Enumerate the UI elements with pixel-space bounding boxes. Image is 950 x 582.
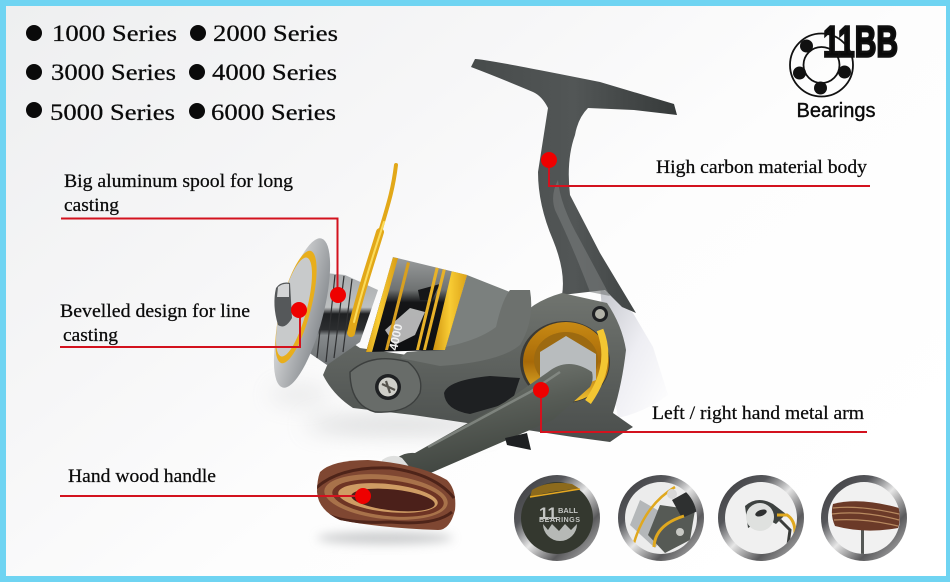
hand metal arm [397,364,593,478]
grey line roller cylinder [445,275,513,350]
spool flange [262,233,342,393]
thumbnail: spool detail [618,475,704,561]
rear rotor screw [592,306,608,322]
callout: metal arm [533,382,867,432]
callout: bevelled design: Bevelled design for line [60,301,250,322]
spinning reel illustration [262,59,677,535]
series list [26,21,338,125]
thumbnail: line roller detail [718,475,804,561]
callout: wood handle: Hand wood handle [68,466,216,487]
series list: 2000 Series [213,21,338,46]
front fork plate [350,359,421,412]
icon: 11BB bearings logo: Bearings [796,100,876,122]
callout: metal arm: Left / right hand metal arm [652,403,864,424]
series list: 1000 Series [52,21,177,46]
silver rear panel [600,287,668,418]
series list: 3000 Series [51,60,176,85]
icon: 11BB bearings logo: 11BB [823,18,898,66]
callout: wood handle [60,466,371,504]
silver handle joint [382,456,412,470]
callout: aluminum spool: casting [64,195,120,216]
series list: 4000 Series [212,60,337,85]
thumbnail: 11 ball bearings: 11 [539,504,557,523]
main body housing [323,293,633,442]
callout: bevelled design [60,301,307,347]
stem highlight [553,180,610,296]
thumbnail: wood knob detail [821,475,907,561]
thumbnail: 11 ball bearings [514,475,600,561]
spool groove lines [317,275,352,362]
wood handle knob [317,460,456,530]
spool black and gold cup [366,257,467,352]
callout: aluminum spool: Big aluminum spool for long [64,171,294,192]
callout: carbon body [541,152,870,186]
callout: bevelled design: casting [63,325,119,346]
spool threaded shaft [308,272,378,365]
callout: carbon body: High carbon material body [656,157,868,178]
gold handle collar [520,321,610,403]
lower foot clip [505,433,531,450]
front screw [375,374,401,400]
gold bail wire [351,165,396,333]
callout: aluminum spool [61,171,346,303]
bail arm: carbon body stem [471,59,677,313]
series list: 6000 Series [211,100,336,125]
series list: 5000 Series [50,100,175,125]
reel shadows [270,385,495,544]
thumbnail: 11 ball bearings: BEARINGS [539,515,580,524]
side window in the housing [444,376,520,414]
model number on spool: 4000 [386,322,406,352]
icon: 11BB bearings logo [790,18,898,122]
rotor arch arm [400,290,531,366]
thumbnail: 11 ball bearings: BALL [558,506,578,515]
spool center nut [274,283,292,326]
